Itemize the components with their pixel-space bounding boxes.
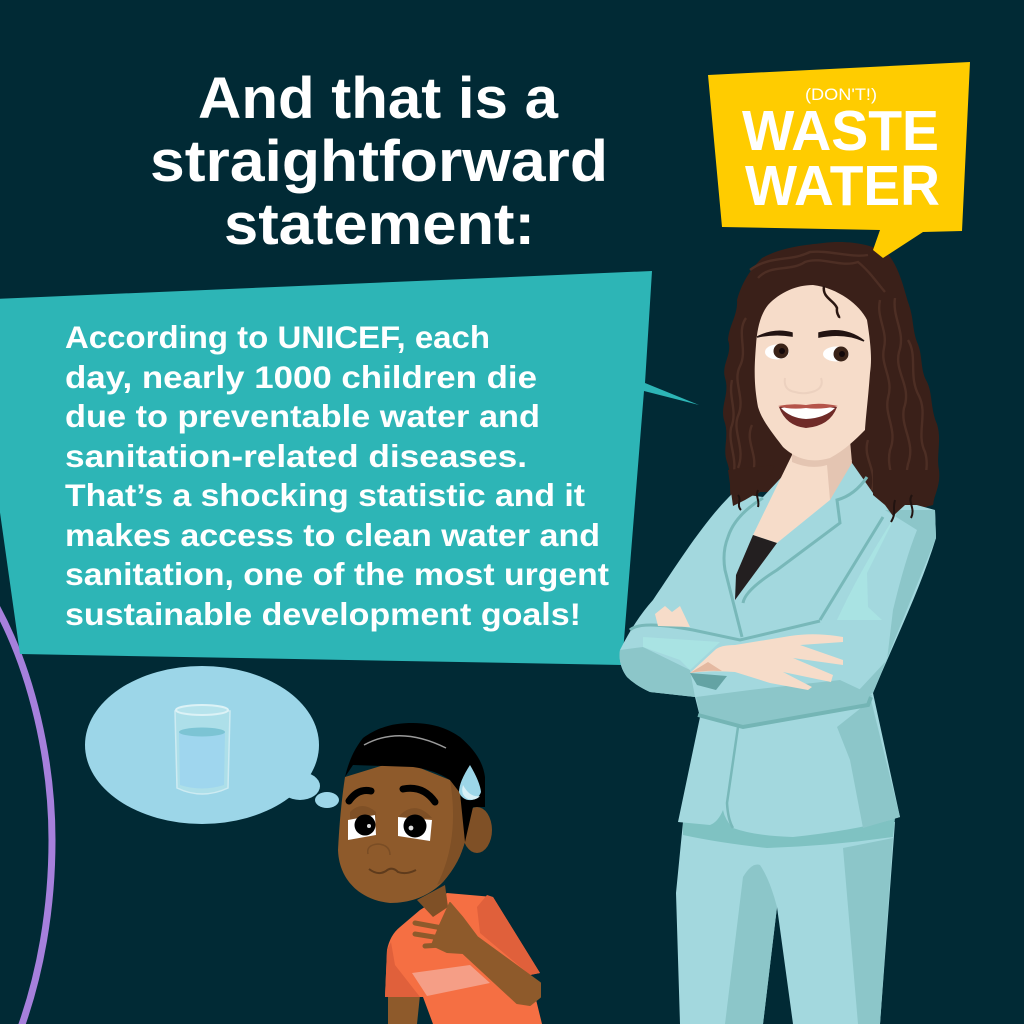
hair strands [730, 252, 927, 504]
trousers [676, 822, 895, 1024]
cuff shadow [690, 673, 727, 690]
nose [785, 378, 822, 393]
hem dark band [698, 697, 871, 727]
shirt shade [385, 895, 540, 997]
neck shade [792, 440, 852, 500]
boy with sweat drop [338, 723, 542, 1024]
shirt stripe [412, 965, 490, 996]
eye right [823, 346, 849, 362]
body text: sanitation-related diseases. [65, 438, 527, 474]
body text: That’s a shocking statistic and it [65, 477, 586, 513]
stray curl [824, 286, 839, 318]
sleeve fold line [630, 621, 820, 640]
eye left [765, 344, 789, 360]
heading [150, 66, 608, 257]
heading: And that is a [198, 66, 559, 131]
hand crossed over arm [690, 634, 843, 690]
ear [462, 807, 492, 853]
left arm [388, 995, 420, 1024]
black top [735, 535, 777, 600]
body text: due to preventable water and [65, 398, 540, 434]
hair [345, 723, 485, 842]
wavy mouth [369, 869, 416, 873]
hair tips over jacket [728, 465, 938, 516]
waist band [683, 800, 895, 848]
mouth [778, 404, 838, 428]
eyebrow right [403, 788, 435, 802]
eye socket shade [350, 806, 432, 822]
icon: glass of water [175, 705, 230, 794]
eyebrows [757, 331, 792, 337]
wrist shade [690, 662, 722, 673]
arm and hand [415, 903, 540, 1005]
yellow speech bubble: (Don't!) Waste Water logo: WATER [745, 154, 940, 218]
purple arc [0, 606, 52, 1024]
heading: straightforward [150, 129, 608, 194]
nose [368, 844, 390, 855]
eye left [348, 814, 376, 840]
heading: statement: [224, 192, 535, 257]
jaw shade [437, 780, 466, 885]
lapel and seam lines [724, 477, 883, 828]
hair curls at tips [738, 490, 913, 522]
cloud [85, 666, 339, 824]
jacket highlight [643, 513, 897, 670]
body text: sanitation, one of the most urgent [65, 556, 610, 592]
body text: sustainable development goals! [65, 596, 581, 632]
yellow speech bubble: (Don't!) Waste Water logo: WASTE [742, 99, 939, 163]
hair shine [364, 736, 446, 748]
bubble shape [0, 271, 699, 665]
trouser shade [725, 838, 893, 1024]
tucked hand [655, 606, 690, 627]
body text: day, nearly 1000 children die [65, 359, 537, 395]
yellow speech bubble: (Don't!) Waste Water logo [708, 62, 970, 258]
jacket shade [620, 510, 936, 828]
thought bubble with glass of water [85, 666, 339, 824]
jacket body [620, 463, 936, 837]
body text: According to UNICEF, each [65, 319, 490, 355]
hair back [723, 242, 939, 516]
woman in teal suit [620, 242, 939, 1024]
shirt [385, 893, 542, 1024]
body text: makes access to clean water and [65, 517, 600, 553]
head [338, 760, 465, 903]
body text [65, 319, 610, 632]
neck and chest [753, 455, 852, 543]
face [755, 285, 871, 460]
icon: sweat drop [459, 765, 481, 800]
speech bubble: UNICEF statistic [0, 271, 699, 665]
eyebrow left [349, 790, 371, 801]
eye right [398, 814, 432, 841]
yellow speech bubble: (Don't!) Waste Water logo: (DON'T!) [805, 85, 877, 104]
fingers [415, 923, 442, 946]
neck [417, 885, 448, 917]
